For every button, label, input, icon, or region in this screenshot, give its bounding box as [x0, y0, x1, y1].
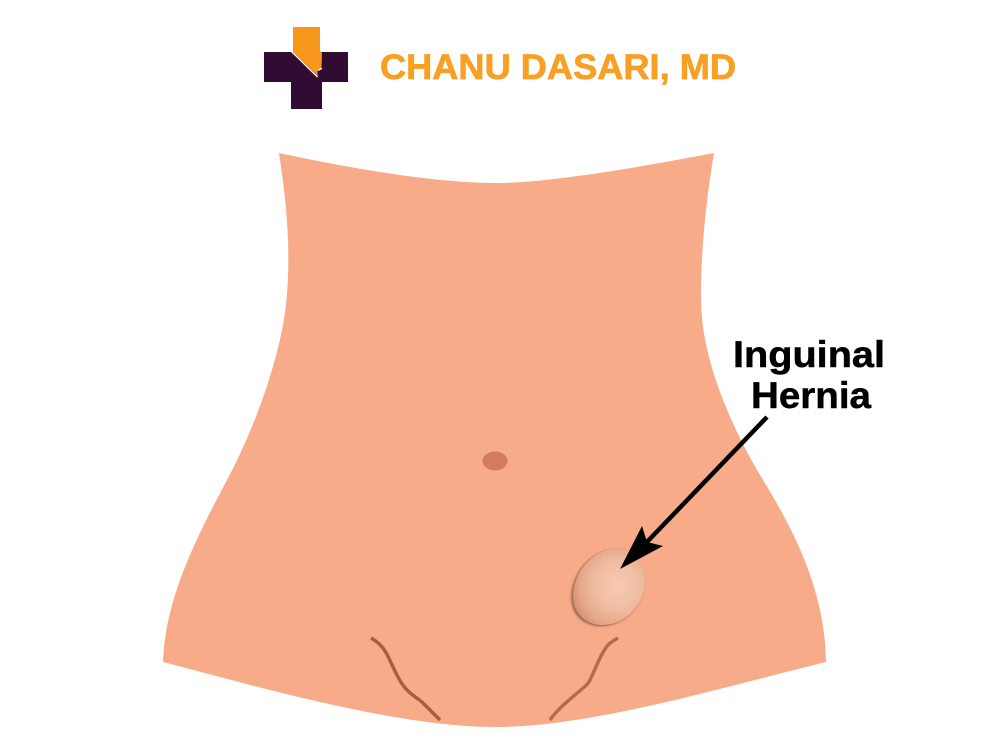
left groin crease	[371, 638, 440, 720]
right groin crease	[550, 638, 618, 720]
label: Inguinal Hernia: Inguinal	[733, 334, 885, 375]
navel	[482, 452, 508, 470]
hernia bulge	[572, 549, 645, 626]
logo: practice name: CHANU DASARI, MD	[380, 48, 736, 87]
logo: cross icon	[264, 27, 348, 109]
label: Inguinal Hernia	[733, 334, 885, 416]
label: Inguinal Hernia: Hernia	[751, 375, 871, 416]
torso	[163, 153, 826, 727]
arrow pointing to hernia	[620, 417, 767, 569]
